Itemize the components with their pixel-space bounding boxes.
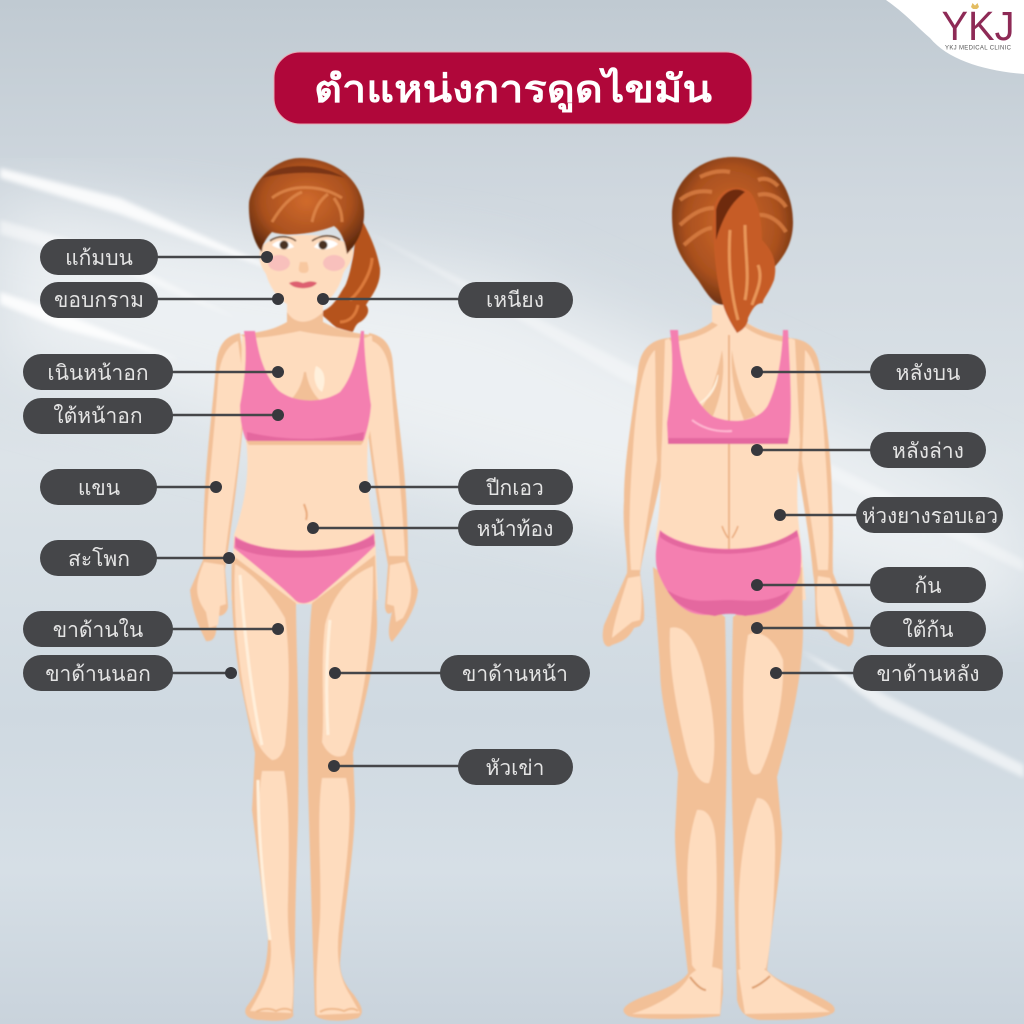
callouts: back view labels (751, 354, 1003, 691)
callout: arm: แขน (78, 477, 120, 500)
logo crown (971, 3, 979, 9)
figure: back view (603, 157, 854, 1020)
figure: front view (190, 158, 418, 1021)
callout: knee: หัวเข่า (486, 757, 544, 780)
callout: back thigh: ขาด้านหลัง (877, 663, 979, 686)
callout: outer thigh: ขาด้านนอก (45, 663, 151, 686)
title: ตำแหน่งการดูดไขมัน (314, 67, 712, 113)
callout: back thigh (770, 655, 1003, 691)
callout: buttocks: ก้น (914, 575, 942, 598)
front legs (231, 555, 377, 1021)
front bra (240, 331, 371, 445)
callout: double chin (317, 282, 573, 318)
front ponytail (320, 212, 380, 341)
callout: buttocks (751, 567, 986, 603)
callout: jawline: ขอบกราม (54, 289, 144, 312)
callout: inner thigh: ขาด้านใน (53, 618, 143, 642)
callout: flank: ปีกเอว (485, 477, 544, 500)
callout: hip: สะโพก (68, 547, 130, 571)
callout: front thigh: ขาด้านหน้า (462, 663, 568, 686)
callout: knee (328, 749, 573, 785)
callout: double chin: เหนียง (486, 289, 544, 312)
callout: jawline (40, 282, 284, 318)
back legs (624, 567, 835, 1020)
callout: arm (40, 469, 222, 505)
front torso (231, 300, 378, 604)
back arms and hands (603, 338, 854, 646)
callout: upper chest (23, 354, 284, 390)
front ponytail highlights (340, 258, 372, 322)
back head (672, 157, 793, 333)
callout: under buttocks (751, 611, 986, 647)
back bra (667, 330, 791, 444)
callout: abdomen: หน้าท้อง (477, 518, 553, 541)
callout: hip (40, 540, 235, 576)
callout: upper cheek (40, 239, 273, 275)
callout: love handles: ห่วงยางรอบเอว (862, 505, 998, 528)
callout: front thigh (329, 655, 590, 691)
callout: flank (359, 469, 573, 505)
callout: upper cheek: แก้มบน (65, 247, 133, 270)
logo corner (886, 0, 1024, 74)
callout: under chest (23, 398, 284, 434)
callout: lower back: หลังล่าง (892, 440, 964, 463)
callout: upper chest: เนินหน้าอก (47, 362, 149, 385)
callout: upper back (751, 354, 986, 390)
callout: inner thigh (23, 611, 284, 647)
logo caption: YKJ MEDICAL CLINIC (945, 46, 1012, 52)
front head (259, 235, 353, 310)
logo wordmark: YKJ (942, 3, 1014, 49)
back torso (656, 305, 806, 600)
front chest highlights (314, 366, 324, 392)
callout: outer thigh (23, 655, 237, 691)
callout: upper back: หลังบน (896, 362, 960, 385)
callouts: left labels front (23, 239, 590, 785)
callout: abdomen (307, 510, 573, 546)
callout: lower back (751, 432, 986, 468)
front panties (234, 533, 375, 603)
front hair (249, 158, 364, 254)
navel (304, 504, 307, 520)
callout: under chest: ใต้หน้าอก (53, 404, 143, 428)
callout: under buttocks: ใต้ก้น (903, 618, 953, 642)
title (274, 52, 752, 124)
callout: love handles (774, 497, 1003, 533)
back panties (656, 530, 801, 616)
front arms and hands (190, 333, 418, 642)
